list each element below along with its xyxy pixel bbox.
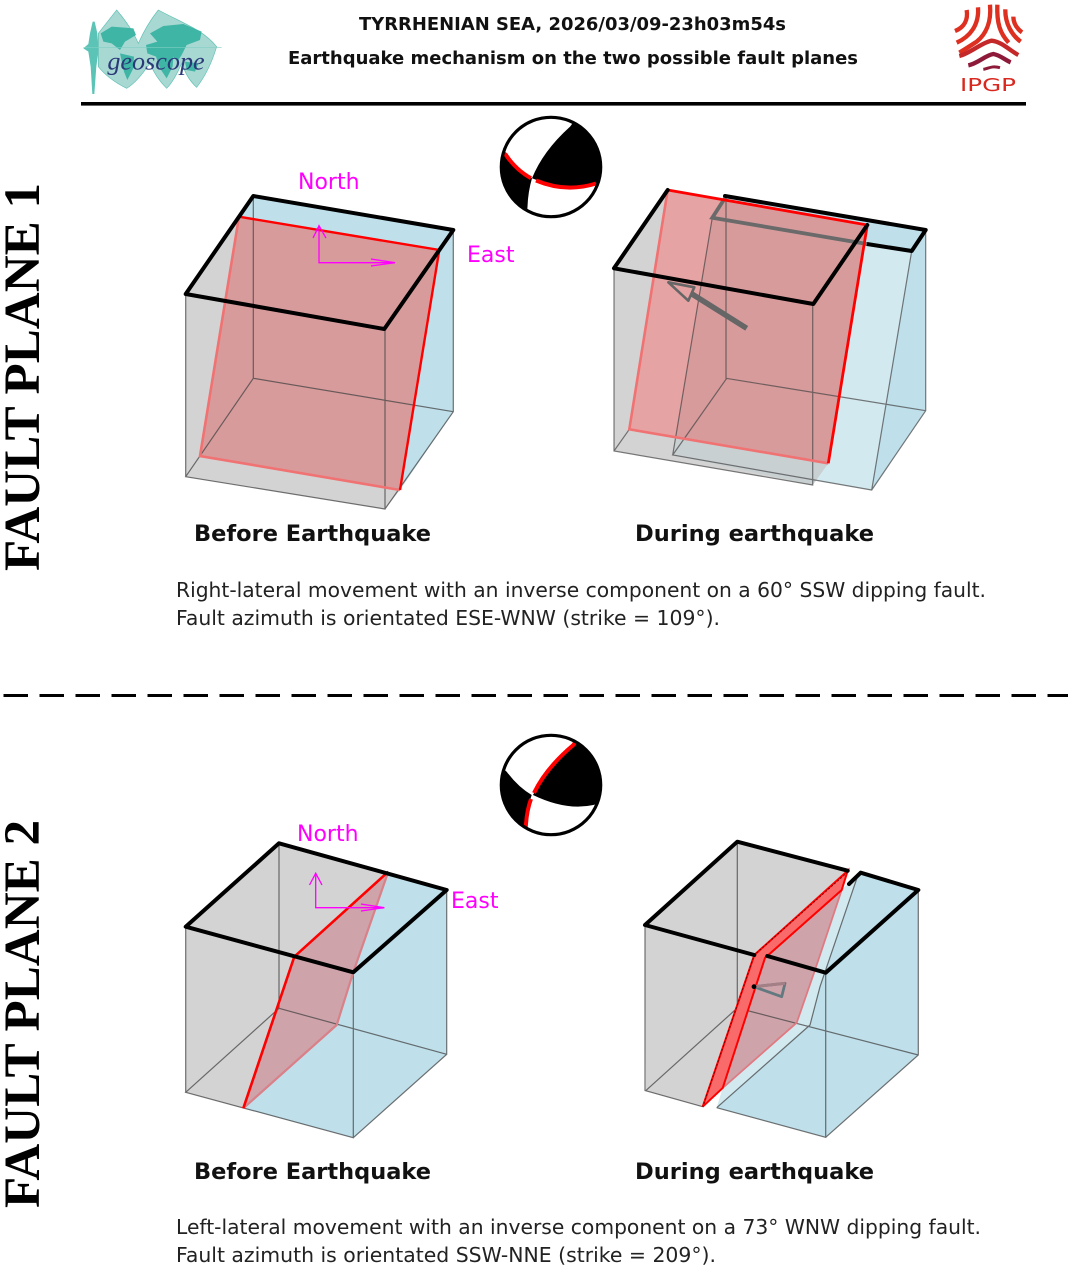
- description: fault plane 2: [176, 1215, 981, 1267]
- header rule: [81, 102, 1026, 106]
- compass arrows: [313, 226, 395, 266]
- description: fault plane 1: Fault azimuth is orientated ESE-WNW (strike = 109°).: [176, 606, 720, 630]
- beachball: fault plane 1: [500, 116, 602, 218]
- label: east: East: [451, 889, 499, 914]
- header: [81, 5, 1026, 106]
- logo: geoscope: [83, 10, 222, 94]
- block diagram: plane 1 during earthquake: [614, 190, 926, 490]
- slip arrow: [752, 983, 785, 997]
- title line 1: TYRRHENIAN SEA, 2026/03/09-23h03m54s: [359, 15, 786, 35]
- caption: before earthquake 1: Before Earthquake: [194, 522, 431, 547]
- label: north: North: [298, 170, 360, 195]
- logo: geoscope: geoscope: [107, 47, 205, 75]
- logo: IPGP: IPGP: [960, 75, 1016, 96]
- dashed divider: [4, 694, 1068, 697]
- block diagram: plane 2 before earthquake: [186, 822, 499, 1138]
- label: north: North: [297, 822, 359, 847]
- beachball: fault plane 2: [500, 734, 602, 836]
- caption: during earthquake 2: During earthquake: [635, 1160, 874, 1185]
- title line 2: Earthquake mechanism on the two possible fault planes: [288, 49, 858, 69]
- description: fault plane 2: Left-lateral movement with an inverse component on a 73° WNW dipping fault.: [176, 1215, 981, 1239]
- caption: before earthquake 2: Before Earthquake: [194, 1160, 431, 1185]
- compass arrows: [310, 873, 384, 911]
- logo: IPGP: [955, 5, 1022, 96]
- slip arrow: [668, 282, 747, 328]
- description: fault plane 2: Fault azimuth is orientated SSW-NNE (strike = 209°).: [176, 1243, 716, 1267]
- description: fault plane 1: Right-lateral movement with an inverse component on a 60° SSW dipping fault.: [176, 578, 986, 602]
- block diagram: plane 2 during earthquake: [645, 842, 918, 1137]
- caption: during earthquake 1: During earthquake: [635, 522, 874, 547]
- label: east: East: [467, 243, 515, 268]
- block diagram: plane 1 before earthquake: [186, 170, 515, 509]
- description: fault plane 1: [176, 578, 986, 630]
